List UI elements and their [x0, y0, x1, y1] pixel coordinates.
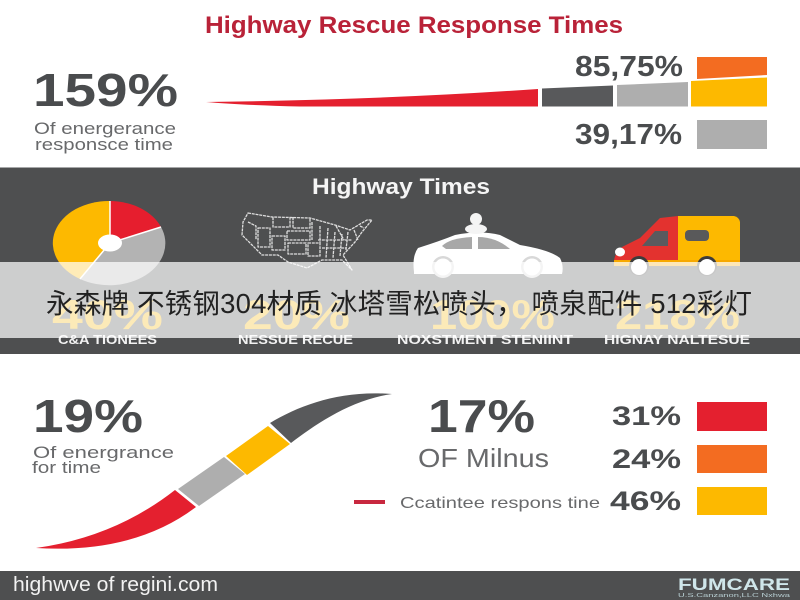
stat: 17%: OF Milnus	[418, 443, 549, 473]
icon: car	[414, 213, 563, 278]
stat: 17%	[418, 390, 549, 473]
footer logo	[678, 575, 790, 599]
panel: highway times	[0, 168, 800, 354]
overlay band with caption	[0, 262, 800, 338]
stat: 19%: 19%	[33, 390, 143, 442]
panel heading: Highway Times	[312, 174, 490, 199]
stat: 19%: Of energrance	[33, 443, 174, 462]
label: highway: HIGNAY NALTESUE	[604, 332, 750, 347]
legend row: 46%: 46%	[610, 486, 681, 516]
footer logo: U.S.Canzanon,LLC Nxhwa	[678, 593, 790, 599]
stat: 85,75%: 85,75%	[575, 51, 683, 83]
callout with leader line	[354, 495, 600, 512]
legend row: 24%: 24%	[612, 444, 681, 474]
stat: 159%: 159%	[33, 64, 178, 116]
stat: 159%: responsce time	[35, 135, 173, 154]
stat: 39,17%: 39,17%	[575, 119, 682, 151]
metric: 100%: 100%	[430, 291, 555, 338]
metric: 20%: 20%	[243, 291, 350, 338]
stat: 159%	[33, 64, 178, 154]
pie chart	[53, 201, 165, 285]
icon: van	[614, 216, 740, 276]
curved segmented ribbon	[36, 393, 392, 549]
label: C&A: C&A TIONEES	[58, 332, 157, 347]
callout with leader line: Ccatintee respons tine	[400, 495, 600, 512]
legend row: 31%	[612, 401, 767, 431]
label: noxstment: NOXSTMENT STENIINT	[397, 332, 573, 347]
title: Highway Rescue Response Times	[205, 12, 623, 39]
stat: 17%: 17%	[428, 390, 535, 442]
legend row: 31%: 31%	[612, 401, 681, 431]
stat: 159%: Of energerance	[34, 119, 176, 138]
stat: 19%	[32, 390, 174, 477]
label: rescue: NESSUE RECUE	[238, 332, 353, 347]
icon: US map	[242, 213, 372, 270]
metric: 40%: 40%	[52, 291, 163, 338]
overlay band with caption: 永森牌 不锈钢304材质 冰塔雪松喷头， 喷泉配件 512彩灯	[46, 288, 752, 319]
legend row: 24%	[612, 444, 767, 474]
footer logo: FUMCARE	[678, 575, 790, 594]
stat: 19%: for time	[32, 458, 101, 477]
tapered segmented bar	[206, 57, 767, 106]
metric: 218%: 218%	[615, 291, 740, 338]
footer url: highwve of regini.com	[13, 574, 218, 596]
legend row: 46%	[610, 486, 767, 516]
footer bar	[0, 571, 800, 600]
legend swatch: grey	[697, 120, 767, 149]
